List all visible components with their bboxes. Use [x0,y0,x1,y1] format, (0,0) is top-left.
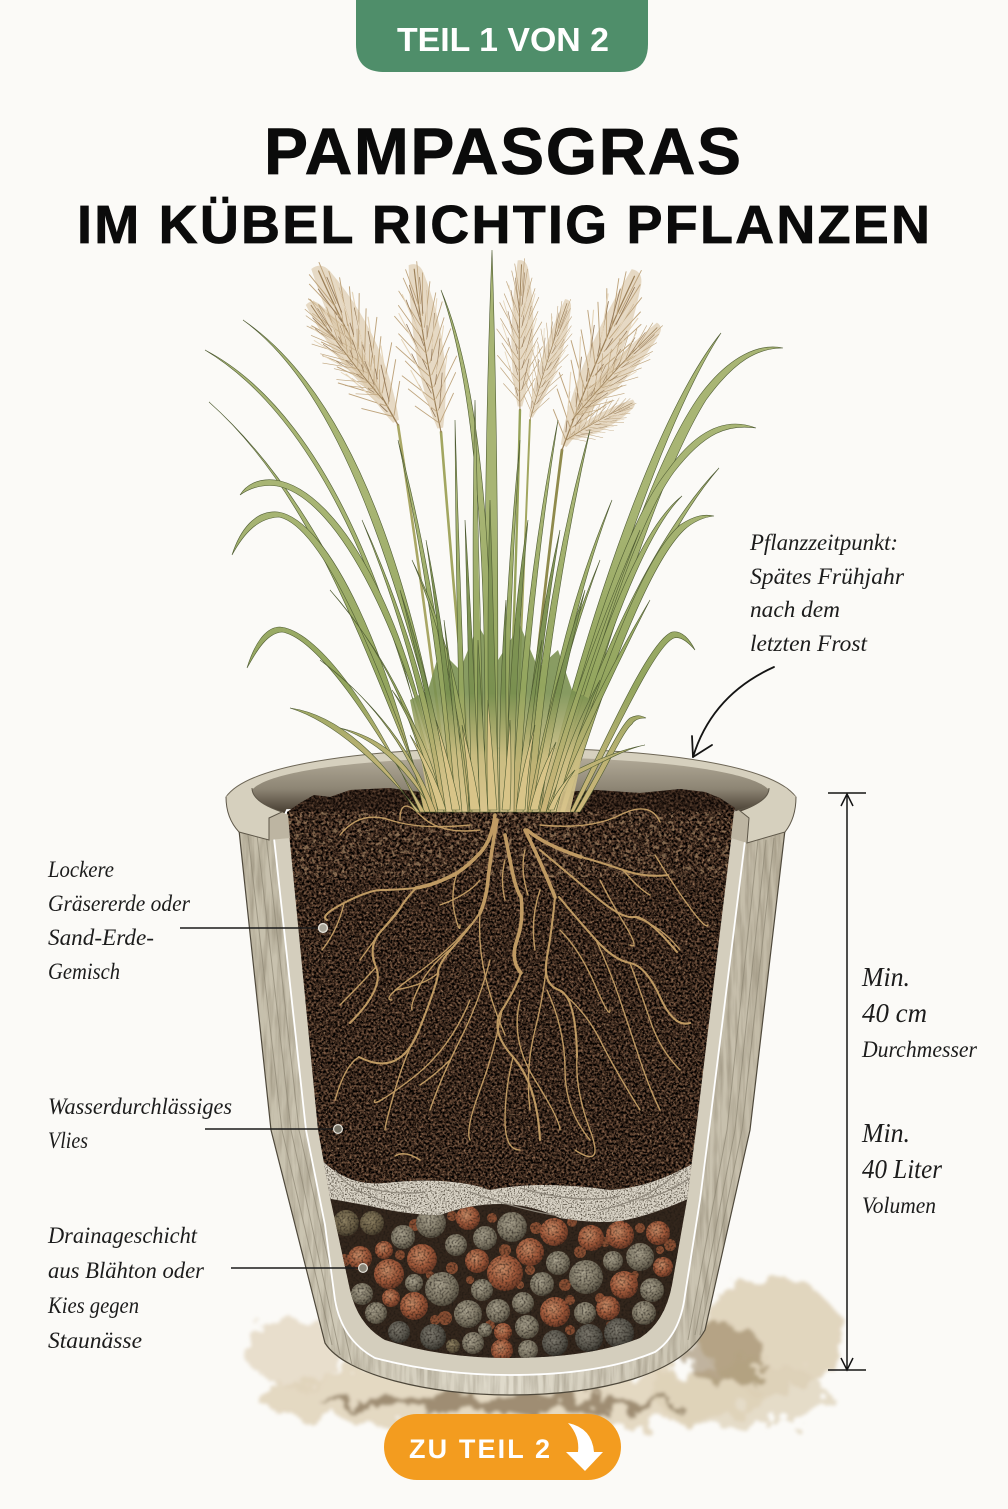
ground stain [247,1277,840,1429]
badge: part 1 of 2: TEIL 1 VON 2 [397,21,609,58]
callout: drainage: Drainageschicht [47,1223,198,1248]
front rim pieces [226,780,796,843]
title: IM KÜBEL RICHTIG PFLANZEN [77,195,930,255]
icon: curved arrow down [566,1423,603,1471]
callout: soil mix [47,857,327,984]
callout: soil mix: Gräsererde oder [48,891,191,916]
callout: drainage: aus Blähton oder [48,1258,205,1283]
pampas plumes [283,250,675,462]
grass blades, outer arching [205,320,783,812]
callout: soil mix: Gemisch [48,959,120,984]
grass clump backing mass [410,625,592,812]
callout: soil mix: Lockere [47,857,114,882]
callout: minimum size [861,962,978,1218]
roots [322,806,708,1160]
title: PAMPASGRAS [264,114,741,188]
callout: fleece [48,1094,342,1153]
pot body with ribbed outer wall [230,820,790,1400]
callout: planting time: letzten Frost [750,631,868,656]
badge: part 1 of 2 [356,0,648,72]
callout: planting time: Spätes Frühjahr [750,564,905,589]
callout: fleece: Vlies [48,1128,88,1153]
pot cut face band [274,810,745,1375]
callout: planting time: Pflanzzeitpunkt: [749,530,898,555]
callout: minimum size: 40 Liter [862,1154,942,1184]
callout: planting time: nach dem [750,597,840,622]
title [77,114,930,255]
callout: drainage [47,1223,367,1353]
callout: minimum size: Min. [861,962,910,992]
pot back rim and inner wall [226,748,796,832]
callout: minimum size: Min. [861,1118,910,1148]
callout: soil mix: Sand-Erde- [48,925,154,950]
grass blades, central clump [320,250,650,812]
callout: planting time [749,530,905,656]
dimension line [828,793,866,1370]
soil layer [280,780,745,1200]
arrow: to pot rim [692,667,774,757]
fleece layer [324,1162,692,1222]
callout: drainage: Kies gegen [47,1293,139,1318]
callout: fleece: Wasserdurchlässiges [48,1094,232,1119]
callout: minimum size: Volumen [862,1193,936,1218]
button: to part 2 [384,1414,621,1480]
plume stems [398,410,562,810]
callout: drainage: Staunässe [48,1328,142,1353]
callout: minimum size: Durchmesser [861,1037,978,1062]
soil, fleece and drainage cavity [280,780,745,1365]
drainage layer [325,1195,695,1365]
callout: minimum size: 40 cm [862,998,927,1028]
button: to part 2: ZU TEIL 2 [409,1434,550,1464]
